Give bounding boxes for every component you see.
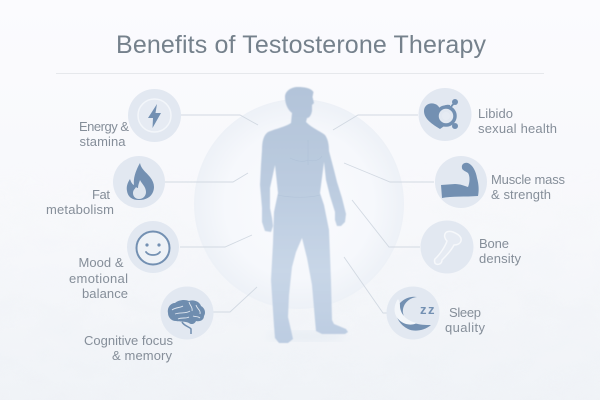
benefit: sleep quality (386, 286, 486, 340)
benefit: muscle mass and strength: & strength (491, 187, 551, 202)
benefit: muscle mass and strength: Muscle mass (491, 172, 566, 187)
benefit: cognitive focus and memory: Cognitive focus (84, 333, 174, 348)
benefit: cognitive focus and memory (84, 286, 214, 363)
benefit: mood and emotional balance (69, 221, 179, 301)
benefit: mood and emotional balance: balance (82, 286, 128, 301)
benefit: energy and stamina: Energy & (79, 119, 129, 134)
benefit: bone density: density (479, 251, 522, 266)
background (0, 331, 600, 400)
benefit: libido and sexual health: sexual health (478, 121, 557, 136)
benefit: mood and emotional balance: Mood & (78, 255, 124, 270)
benefit: sleep quality: quality (445, 320, 486, 335)
benefit: libido and sexual health: Libido (478, 106, 513, 121)
title: Benefits of Testosterone Therapy (116, 31, 486, 59)
benefit: cognitive focus and memory: & memory (112, 348, 172, 363)
connector lines (165, 115, 434, 313)
benefit: muscle mass and strength (435, 156, 566, 208)
benefit: bone density (420, 220, 522, 274)
benefit: bone density: Bone (479, 236, 509, 251)
benefit: energy and stamina: stamina (80, 134, 126, 149)
benefit: energy and stamina (79, 89, 181, 149)
central halo circle (194, 99, 404, 309)
benefit: fat metabolism: metabolism (46, 202, 114, 217)
benefit: libido and sexual health (418, 88, 557, 141)
benefit: sleep quality: zz (420, 302, 436, 317)
benefit: fat metabolism: Fat (92, 187, 110, 202)
human figure silhouette (260, 87, 348, 343)
benefit: mood and emotional balance: emotional (69, 271, 128, 286)
benefit: sleep quality: Sleep (449, 305, 481, 320)
benefit: fat metabolism (46, 156, 165, 217)
